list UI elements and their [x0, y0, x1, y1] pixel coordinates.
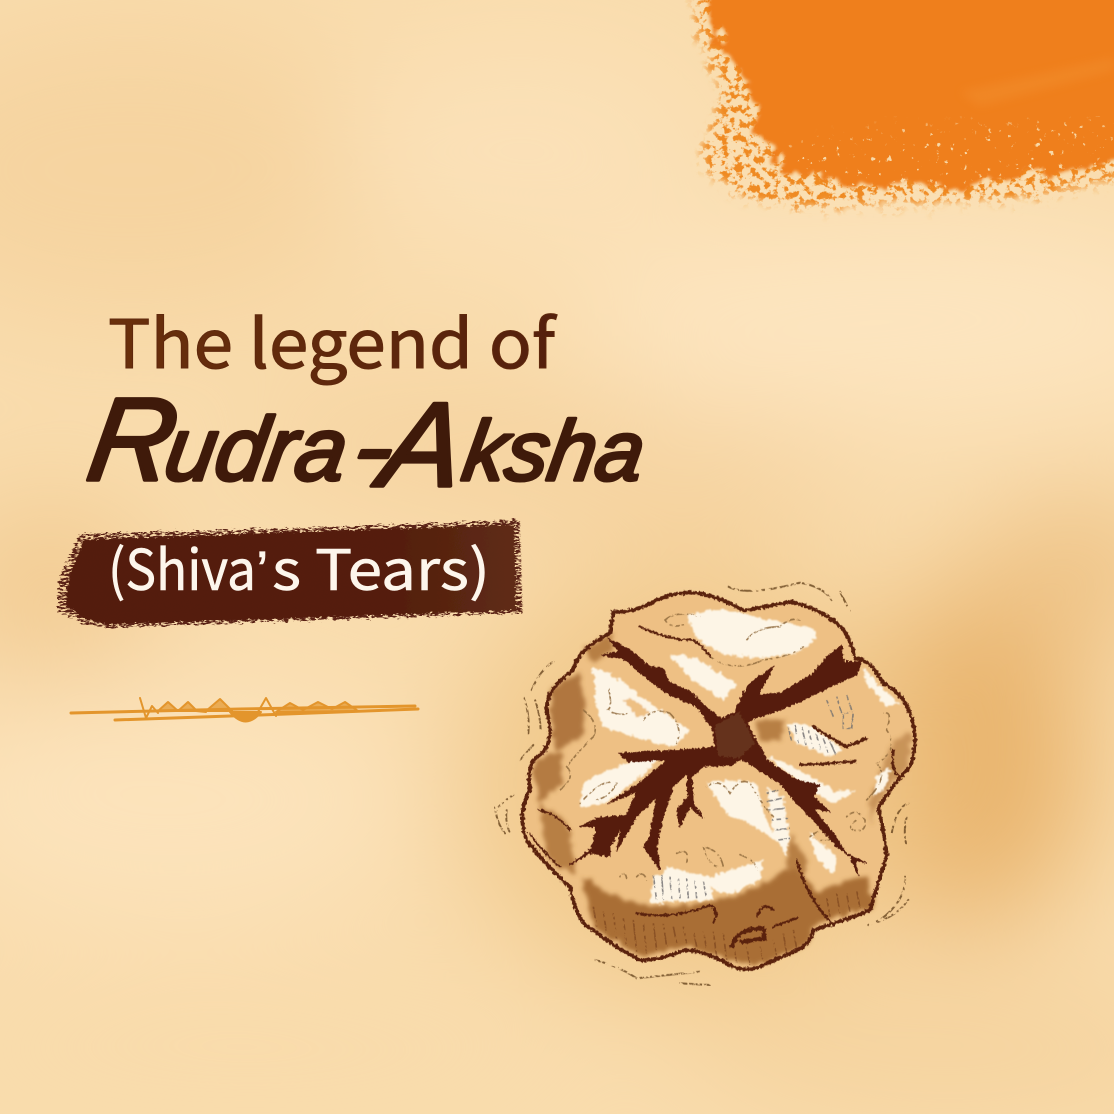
heading: Rudra-Aksha: udra: [159, 400, 355, 500]
decorative squiggle: orange heartbeat line: [71, 698, 418, 722]
heading: Rudra-Aksha: A: [367, 378, 474, 512]
heading: Rudra-Aksha: -: [347, 398, 401, 498]
rim hatch marks: [593, 890, 860, 965]
bead outline: [522, 593, 915, 969]
lower-right branch: [737, 730, 867, 875]
motion strokes around bead: [495, 583, 908, 985]
upper-right branch: [733, 645, 862, 722]
brush banner with subtitle: [57, 520, 523, 628]
upper-left branch: [602, 638, 723, 730]
illustration: rudraksha bead: [495, 583, 915, 985]
lower-left large branch: [570, 747, 740, 870]
wrinkle lines: [560, 614, 892, 880]
subtitle: Shiva's Tears: ’: [256, 539, 268, 602]
dark central star and branches: [570, 638, 867, 875]
heading: The legend of: The legend of: [108, 291, 557, 388]
inner dark creases: [530, 627, 903, 947]
bead body: [522, 593, 915, 969]
subtitle: Shiva's Tears: (Shiva: [108, 526, 256, 607]
orange paint swash: [692, 0, 1114, 208]
subtitle: Shiva's Tears: s Tears): [272, 526, 490, 607]
white highlights: [580, 610, 900, 903]
grey hatching: [653, 695, 853, 900]
heading: Rudra-Aksha: R: [80, 375, 186, 506]
brown shading lower rim: [533, 632, 912, 965]
heading: Rudra-Aksha: ksha: [457, 404, 651, 499]
centre knot: [713, 710, 757, 760]
